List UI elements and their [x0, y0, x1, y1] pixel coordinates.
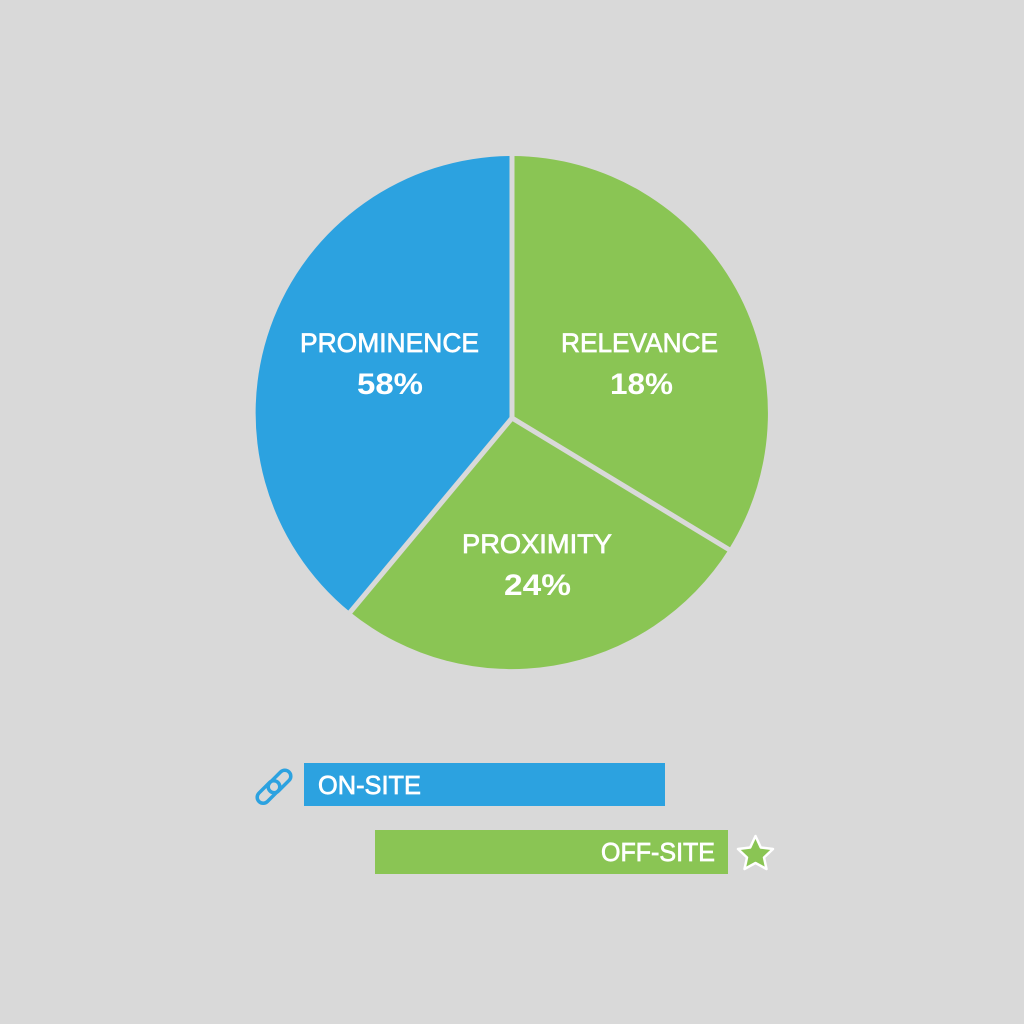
slice: relevance	[512, 156, 768, 549]
icon: star	[738, 836, 773, 869]
slice: proximity	[350, 418, 729, 669]
label: proximity: PROXIMITY	[462, 529, 612, 559]
slice: prominence	[256, 156, 512, 612]
label: proximity	[462, 529, 612, 602]
label: relevance: RELEVANCE	[561, 328, 718, 358]
bar: off-site: OFF-SITE	[601, 837, 715, 867]
label: proximity: 24%	[504, 569, 571, 602]
label: prominence	[300, 328, 479, 401]
label: prominence: 58%	[357, 368, 423, 401]
bar: on-site: ON-SITE	[318, 770, 421, 800]
bar: on-site	[304, 763, 665, 806]
bar: off-site	[375, 830, 728, 874]
label: relevance	[561, 328, 718, 401]
label: prominence: PROMINENCE	[300, 328, 479, 358]
pie chart	[256, 150, 768, 669]
label: relevance: 18%	[610, 368, 673, 401]
slice dividers	[347, 150, 733, 616]
icon: chain link	[255, 768, 293, 806]
